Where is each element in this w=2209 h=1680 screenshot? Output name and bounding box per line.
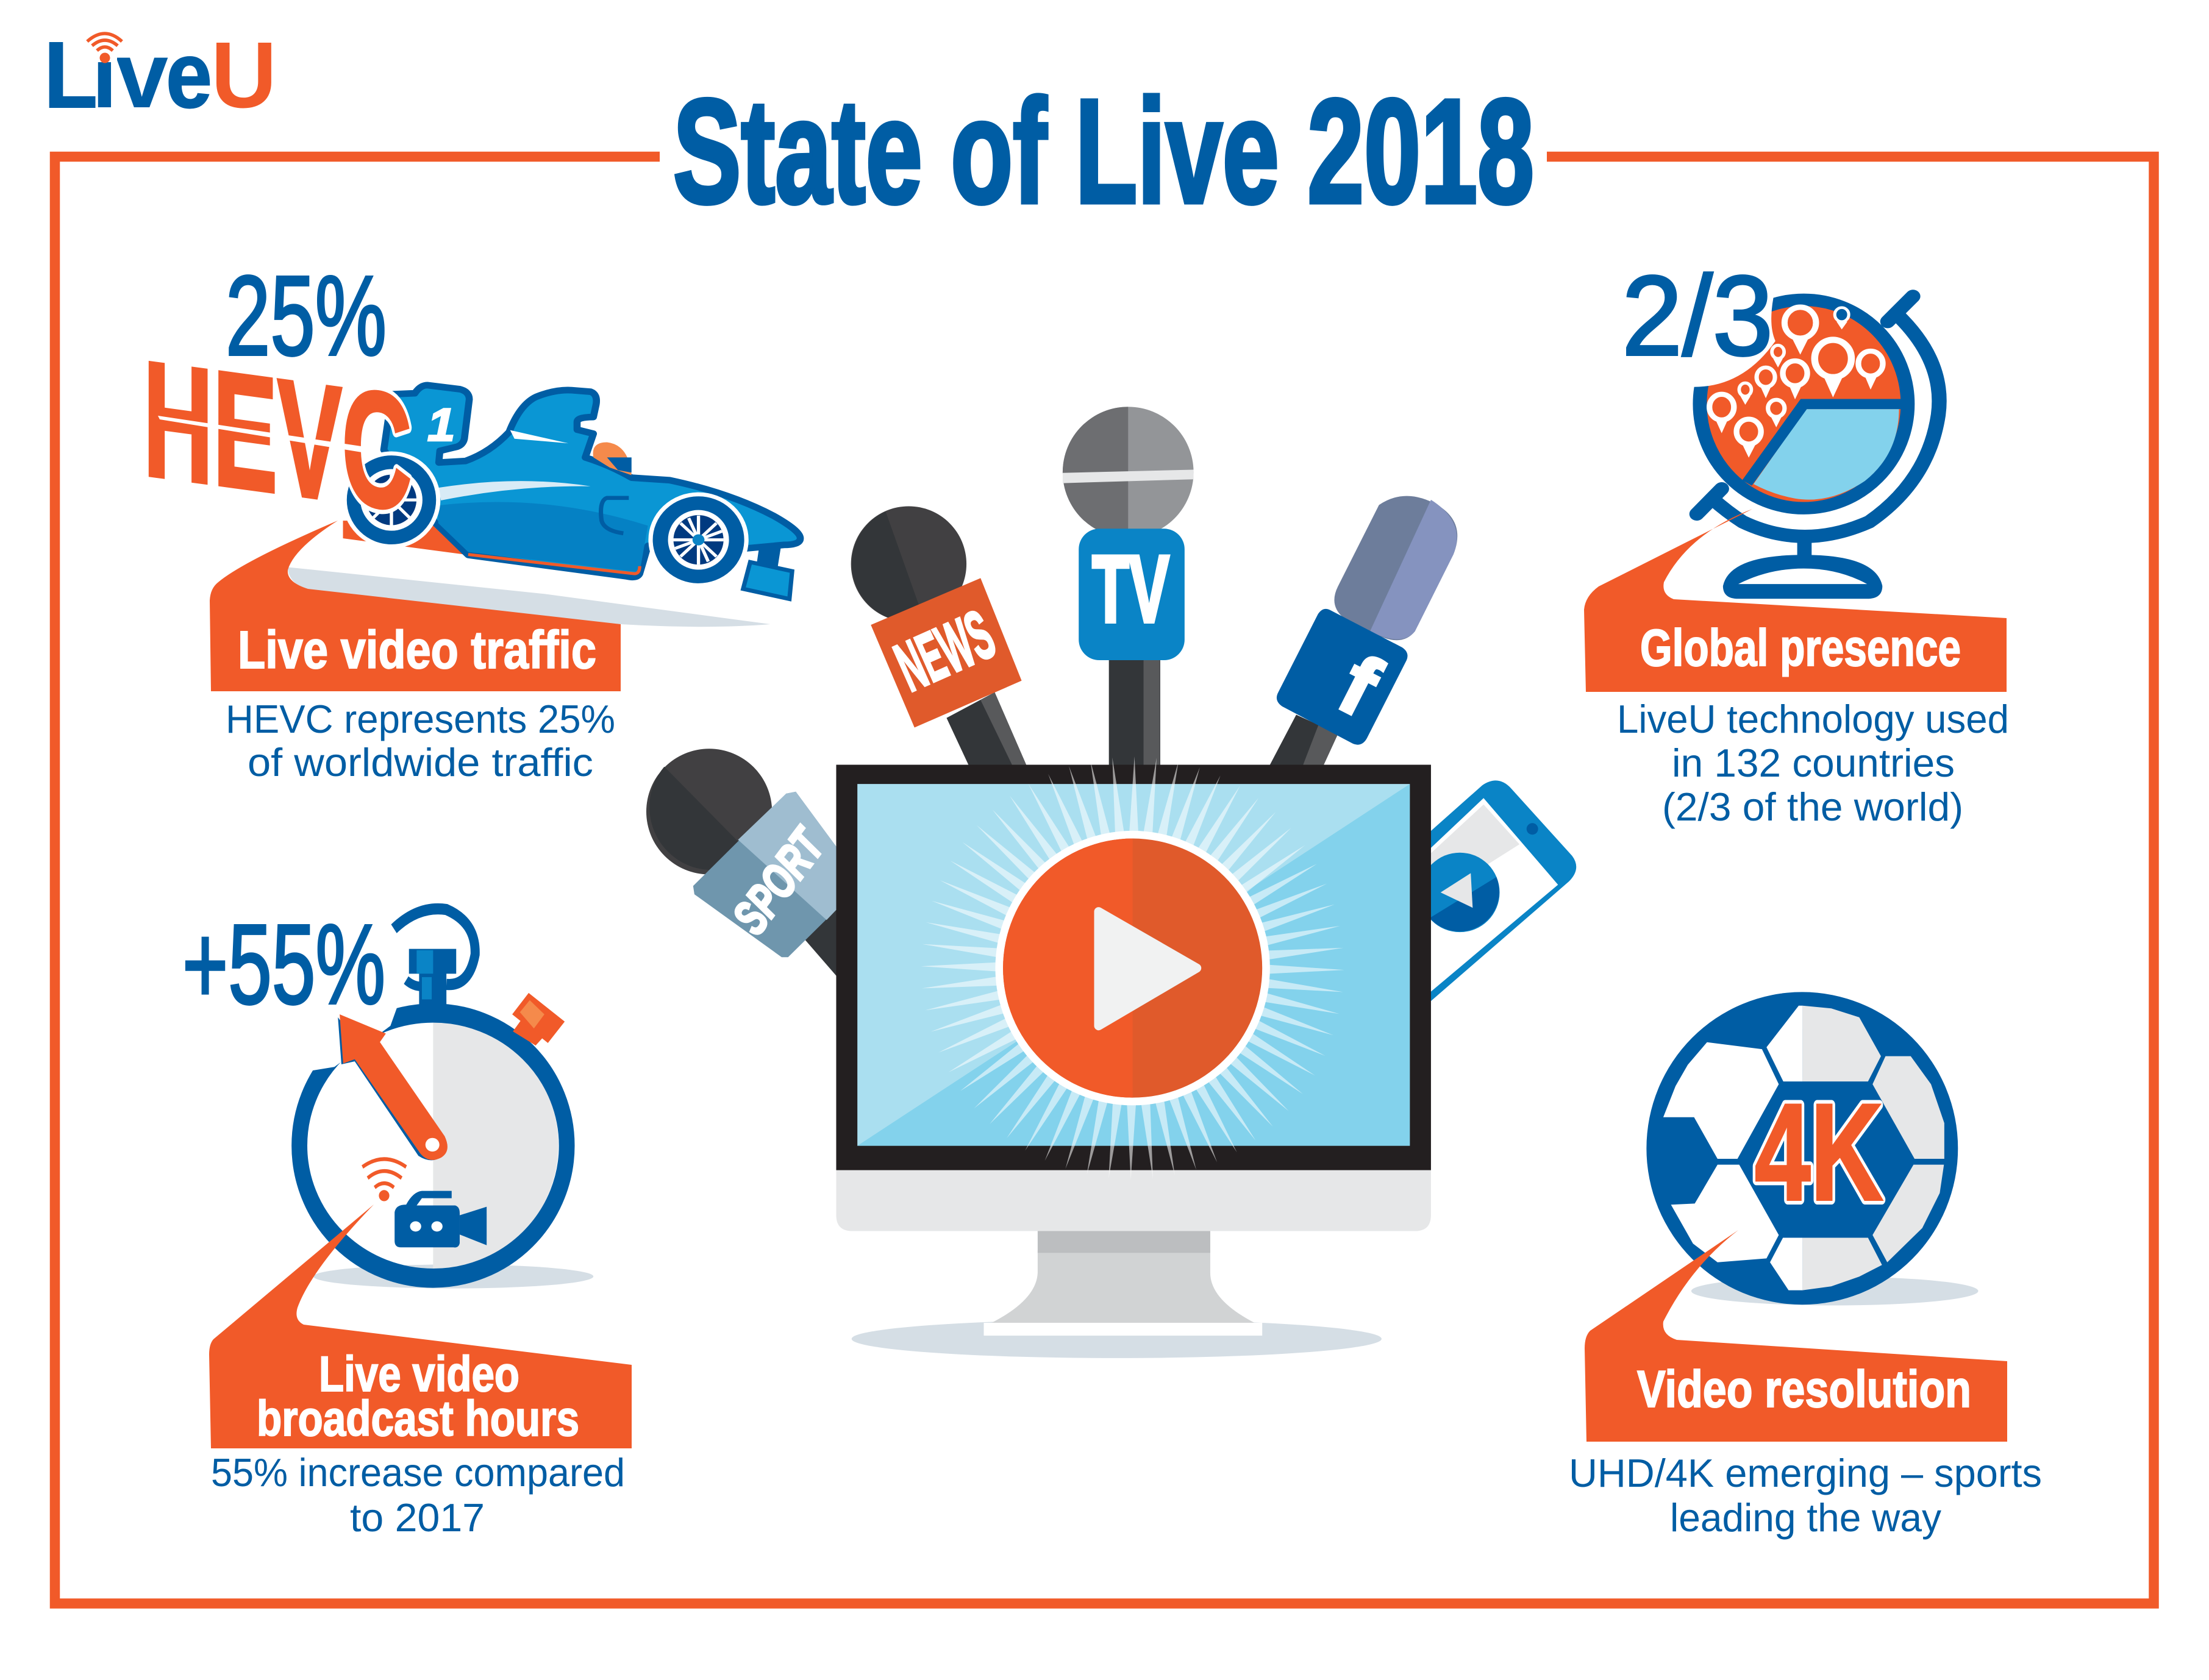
heading: global presence: Global presence: [1640, 619, 1961, 677]
microphone: sport: [646, 749, 841, 981]
logo: LiveU: U: [211, 23, 277, 127]
callout: broadcast hours: [209, 1205, 632, 1448]
monitor stand: [983, 1230, 1262, 1336]
phone: [1420, 780, 1576, 1006]
logo: LiveU: L: [44, 23, 98, 127]
heading: broadcast hours: broadcast hours: [257, 1391, 579, 1447]
heading: video resolution: Video resolution: [1637, 1361, 1971, 1418]
microphone: news: NEWS: [885, 596, 1005, 706]
panel: global presence: [1584, 253, 2009, 829]
heading: live video traffic: Live video traffic: [238, 621, 596, 680]
description: broadcast hours: 55% increase compared: [211, 1450, 625, 1495]
logo: LiveU: v: [116, 23, 168, 127]
panel: live video traffic: [143, 253, 801, 785]
description: video resolution: [1569, 1451, 2042, 1540]
title: State of Live 2018: [673, 69, 1534, 234]
microphone: news: [851, 506, 1027, 766]
description: broadcast hours: to 2017: [350, 1495, 485, 1540]
description: video resolution: leading the way: [1670, 1495, 1941, 1540]
description: HEVC: of worldwide traffic: [248, 740, 593, 785]
monitor chin: [836, 1169, 1431, 1231]
microphone: facebook: [1269, 496, 1457, 766]
HEVC speed text: [143, 327, 412, 546]
description: broadcast hours: [211, 1450, 625, 1540]
location pins: [1710, 307, 1883, 458]
icon: video camera: [394, 1191, 487, 1247]
icon: wifi signal: [362, 1159, 406, 1201]
heading: broadcast hours: Live video: [319, 1347, 519, 1402]
callout: video resolution: [1585, 1230, 2007, 1442]
stat: 2/3: 2/3: [1622, 253, 1773, 379]
description: video resolution: UHD/4K emerging – sports: [1569, 1451, 2042, 1495]
description: HEVC: [226, 697, 615, 785]
microphone: TV: [1063, 407, 1194, 766]
HEVC speed text: HEVC: [143, 327, 412, 546]
callout: global presence: [1584, 509, 2007, 692]
stopwatch illustration: [293, 909, 593, 1289]
panel: live video broadcast hours: [182, 902, 632, 1540]
microphone: facebook: f: [1325, 637, 1394, 735]
monitor shadow: [852, 1320, 1382, 1358]
globe illustration: [1682, 283, 1940, 599]
4K badge: 4K: [1755, 1075, 1883, 1229]
sunburst rays: [921, 756, 1344, 1180]
microphone: sport: SPORT: [723, 817, 836, 944]
description: HEVC: HEVC represents 25%: [226, 697, 615, 741]
football illustration: [1646, 992, 1979, 1305]
stat: +55%: +55%: [182, 902, 385, 1028]
logo: LiveU: [44, 23, 277, 127]
play button: [995, 831, 1270, 1105]
monitor screen: [836, 765, 1431, 1170]
microphone: TV: TV: [1092, 536, 1169, 642]
description: global presence: LiveU technology used: [1617, 697, 2009, 741]
description: global presence: (2/3 of the world): [1662, 785, 1963, 829]
description: global presence: in 132 countries: [1672, 741, 1955, 785]
heading: broadcast hours: [257, 1347, 579, 1447]
HEVC speed text: HEVC: [143, 327, 412, 546]
panel: central monitor with microphones: [646, 407, 1576, 1358]
description: global presence: [1617, 697, 2009, 829]
callout: live video traffic: [210, 521, 621, 691]
4K badge: 4K: [1755, 1075, 1883, 1229]
stat: 25%: 25%: [226, 253, 387, 379]
car illustration: [287, 385, 801, 627]
panel: video resolution: [1569, 992, 2042, 1540]
car illustration: 1: [427, 399, 455, 450]
logo: LiveU: e: [166, 23, 212, 127]
logo: LiveU: i: [91, 23, 118, 127]
